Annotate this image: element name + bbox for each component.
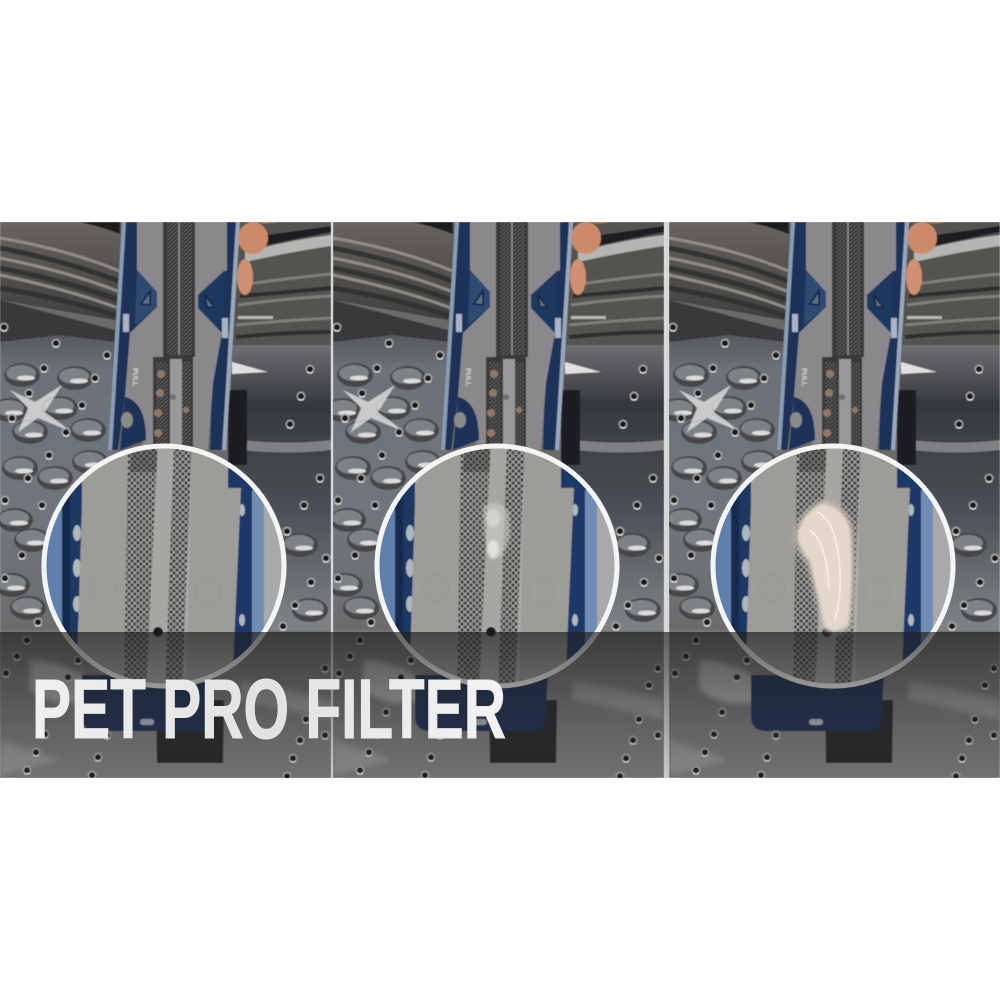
panel: filter full of pet hair [661,222,1000,780]
magnifier ring [377,446,617,686]
magnifier ring [713,446,953,686]
panel: filter with some lint [325,222,664,780]
magnifier ring [44,446,284,686]
title: PET PRO FILTER [32,662,506,756]
dark caption band [0,632,1000,778]
pet hair clump [795,500,855,635]
panel: clean filter [0,222,331,780]
lint smudge [483,503,510,560]
photo strip backing [0,222,1000,778]
